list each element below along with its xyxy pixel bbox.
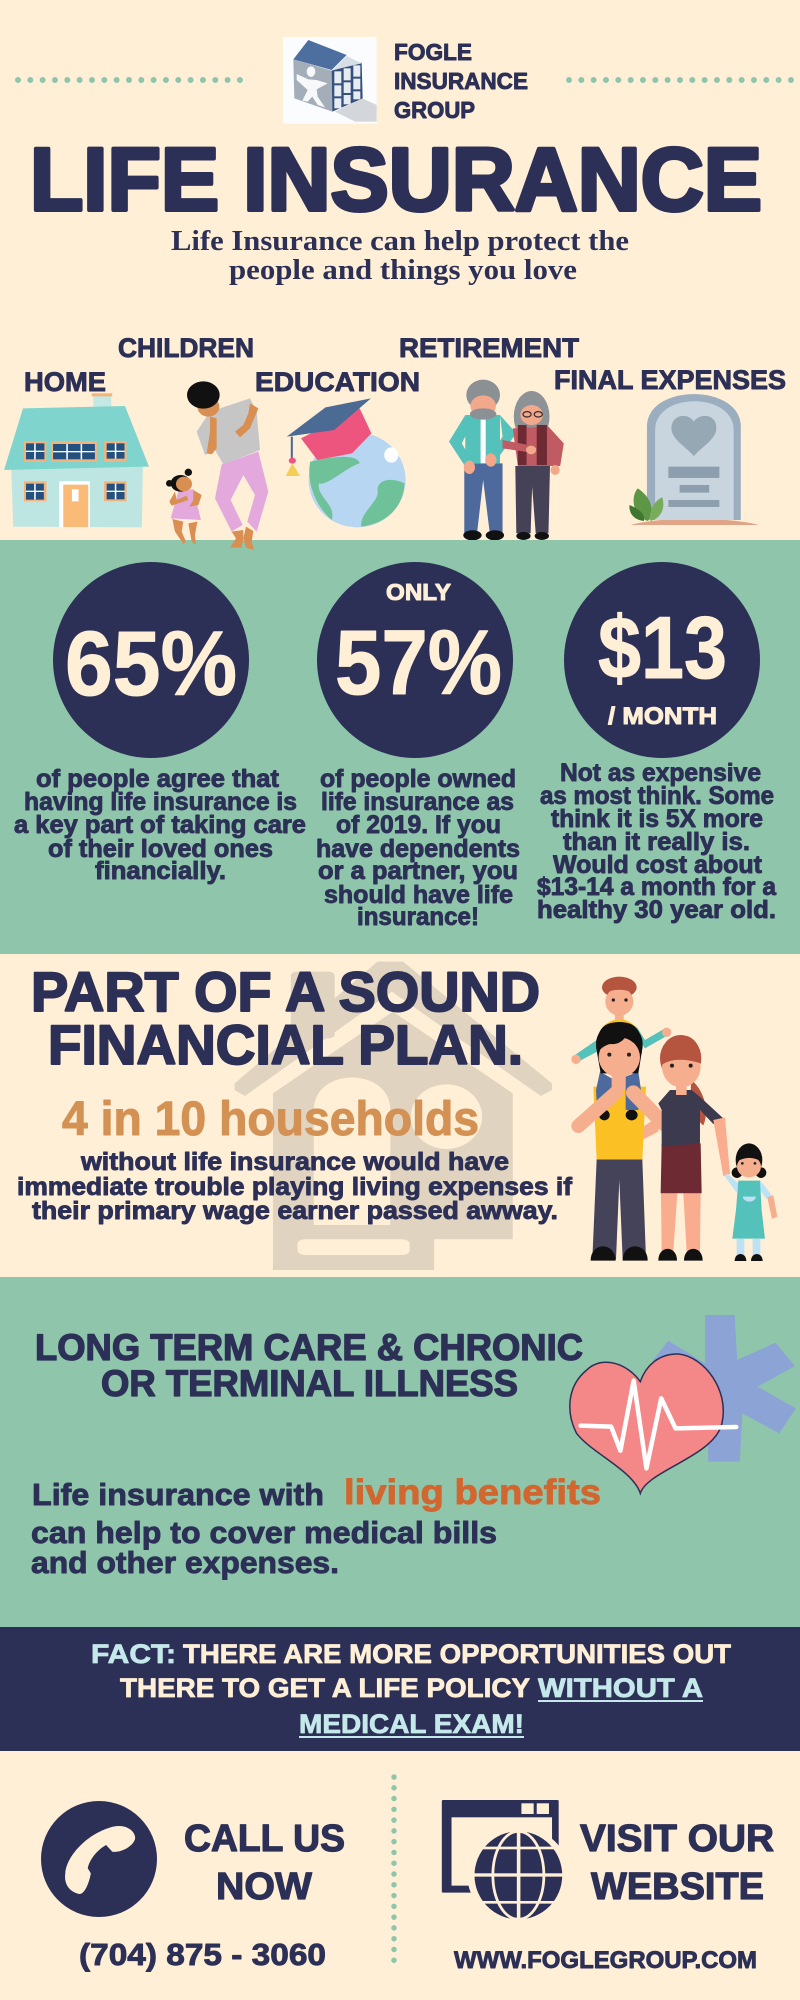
icon: heart with medical star xyxy=(570,1315,796,1493)
icon: house xyxy=(4,393,149,527)
dotted divider xyxy=(391,1777,397,1971)
call text: CALL US xyxy=(184,1818,345,1860)
category labels: FINAL EXPENSES xyxy=(554,365,786,395)
subtitle: Life Insurance can help protect the xyxy=(171,225,629,257)
panel: contact call xyxy=(41,1801,345,1972)
watermark: house xyxy=(235,962,552,1270)
panel: fact banner xyxy=(0,1627,800,1751)
stat: 65%: of their loved ones xyxy=(48,835,273,863)
stat: 57%: have dependents xyxy=(316,835,520,863)
logo text: INSURANCE xyxy=(394,68,528,94)
logo: house building xyxy=(283,37,377,124)
category labels xyxy=(24,333,786,397)
panel: fact banner: MEDICAL EXAM! xyxy=(299,1709,524,1739)
title: LIFE INSURANCE xyxy=(30,129,762,229)
panel: fact banner: THERE TO GET A LIFE POLICY xyxy=(120,1673,530,1703)
category labels: HOME xyxy=(24,367,106,397)
text block: immediate trouble playing living expenses if xyxy=(17,1173,573,1201)
text block: can help to cover medical bills xyxy=(31,1515,497,1550)
panel: financial plan xyxy=(17,960,777,1270)
heading: FINANCIAL PLAN. xyxy=(48,1013,523,1076)
stat: 57%: 57% xyxy=(335,612,502,714)
panel: contact website xyxy=(442,1800,774,1974)
stat: $13 per month: Would cost about xyxy=(553,851,763,879)
logo text xyxy=(394,39,528,123)
text block: living benefits xyxy=(344,1473,601,1512)
heading xyxy=(35,1327,583,1404)
stat: $13 per month: as most think. Some xyxy=(540,782,774,810)
subtitle: people and things you love xyxy=(229,254,577,286)
stat: 65% xyxy=(14,562,306,885)
text block: without life insurance would have xyxy=(80,1148,509,1176)
stat: 57%: life insurance as xyxy=(321,788,514,816)
logo text: FOGLE xyxy=(394,39,472,65)
stat: 57%: insurance! xyxy=(357,903,479,931)
icon: senior couple xyxy=(449,380,564,540)
stat: 65%: 65% xyxy=(65,613,237,715)
subtitle xyxy=(171,225,629,286)
text block xyxy=(17,1148,573,1225)
heading xyxy=(31,960,540,1076)
stat: 65%: of people agree that xyxy=(36,765,280,793)
icon: phone xyxy=(41,1801,157,1917)
category labels: EDUCATION xyxy=(255,367,420,397)
website text: WEBSITE xyxy=(591,1866,764,1908)
logo text: GROUP xyxy=(394,97,475,123)
category labels: CHILDREN xyxy=(118,333,254,363)
panel: fact banner: FACT: xyxy=(91,1639,176,1669)
icon: family xyxy=(571,977,777,1261)
category labels: RETIREMENT xyxy=(399,333,580,363)
icon: graduation cap on globe xyxy=(286,398,406,527)
panel: long term care xyxy=(0,1277,800,1627)
stat: $13 per month: than it really is. xyxy=(563,828,750,856)
stat: 65%: a key part of taking care xyxy=(14,811,306,839)
text block xyxy=(31,1473,601,1580)
stat: $13 per month: $13 xyxy=(598,598,727,697)
icon: browser and globe xyxy=(442,1800,569,1924)
stat: 57%: or a partner, you xyxy=(318,857,518,885)
call text: NOW xyxy=(216,1866,312,1908)
stat: 57%: should have life xyxy=(324,881,513,909)
text block: their primary wage earner passed awway. xyxy=(32,1197,558,1225)
website text xyxy=(580,1818,774,1908)
panel: fact banner: WITHOUT A xyxy=(538,1673,703,1703)
stat: $13 per month: $13-14 a month for a xyxy=(537,873,777,901)
stat: 57%: of people owned xyxy=(320,765,516,793)
heading: LONG TERM CARE & CHRONIC xyxy=(35,1327,583,1368)
stat: 57%: of 2019. If you xyxy=(336,811,501,839)
heading: PART OF A SOUND xyxy=(31,960,540,1023)
heading: OR TERMINAL ILLNESS xyxy=(101,1363,518,1404)
stat: $13 per month: think it is 5X more xyxy=(551,805,763,833)
website url: WWW.FOGLEGROUP.COM xyxy=(454,1947,757,1974)
stat: 65%: financially. xyxy=(95,857,226,885)
header: logo and company name xyxy=(18,37,791,124)
website text: VISIT OUR xyxy=(580,1818,774,1860)
phone number: (704) 875 - 3060 xyxy=(79,1937,326,1972)
stat: $13 per month: Not as expensive xyxy=(560,759,761,787)
dotted line right xyxy=(569,77,791,83)
stat: 65%: having life insurance is xyxy=(24,788,297,816)
dotted line left xyxy=(18,77,240,83)
callout: 4 in 10 households: 4 in 10 households xyxy=(62,1093,479,1146)
stat: $13 per month: / MONTH xyxy=(608,703,717,730)
icon: mother and child xyxy=(166,381,268,550)
panel: fact banner: THERE ARE MORE OPPORTUNITIES OUT xyxy=(183,1639,732,1669)
text block: Life insurance with xyxy=(32,1477,324,1512)
stat: $13 per month xyxy=(537,562,777,924)
panel: statistics xyxy=(0,540,800,954)
stat: 57% xyxy=(316,562,520,931)
stat: 57%: ONLY xyxy=(386,579,451,605)
icon: tombstone xyxy=(629,394,759,525)
call text xyxy=(184,1818,345,1908)
text block: and other expenses. xyxy=(31,1545,339,1580)
stat: $13 per month: healthy 30 year old. xyxy=(537,896,776,924)
